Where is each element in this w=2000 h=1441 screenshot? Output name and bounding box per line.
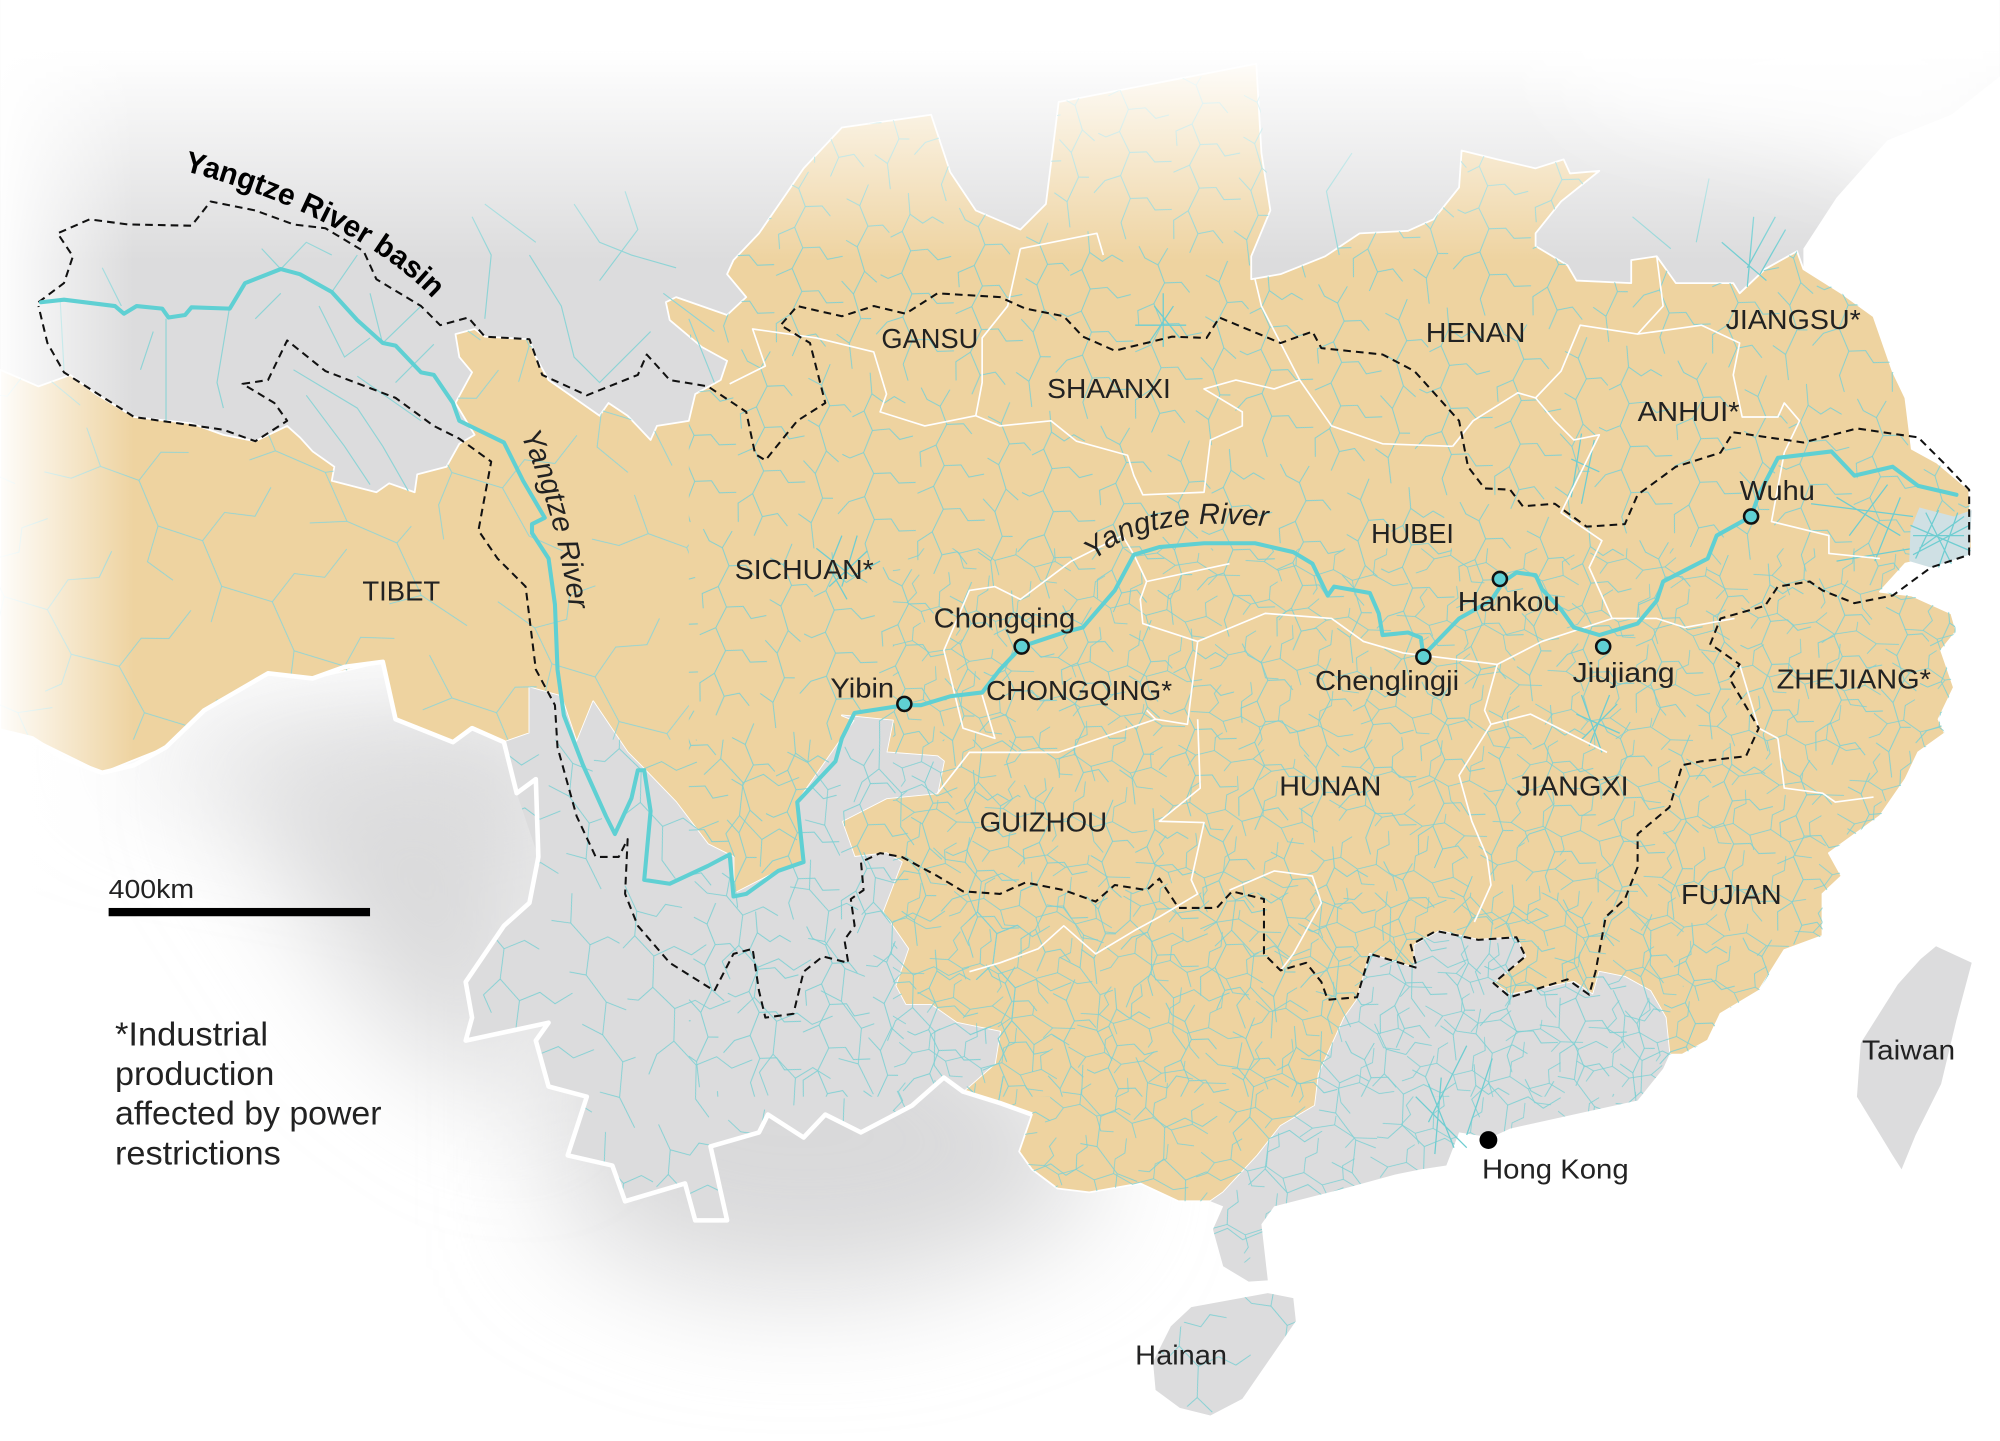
region and city labels: HUNAN xyxy=(1279,771,1381,802)
tan shaded region: provinces in the basin xyxy=(0,64,1972,1201)
region and city labels: SICHUAN* xyxy=(735,554,874,585)
grey land: Guangdong coast xyxy=(1210,931,1669,1282)
region and city labels: Hainan xyxy=(1135,1339,1227,1370)
city marker: Jiujiang xyxy=(1596,640,1610,654)
fade gradient: left edge xyxy=(0,0,134,893)
region and city labels: SHAANXI xyxy=(1047,373,1171,404)
region and city labels: JIANGXI xyxy=(1516,771,1629,802)
region and city labels: GANSU xyxy=(881,323,978,354)
region and city labels: Chenglingji xyxy=(1315,665,1459,696)
city marker: Wuhu xyxy=(1744,509,1758,523)
footnote xyxy=(115,1017,382,1172)
tributaries in the grey north and west xyxy=(60,153,1709,491)
Yangtze River main channel xyxy=(41,269,1956,896)
region and city labels: ANHUI* xyxy=(1638,396,1740,427)
footnote: restrictions xyxy=(115,1135,281,1172)
region and city labels xyxy=(362,304,1955,1370)
grey land north of the basin xyxy=(0,0,2000,536)
island: Taiwan xyxy=(1857,946,1972,1169)
city marker: Hankou xyxy=(1493,572,1507,586)
region and city labels: Hankou xyxy=(1458,586,1560,617)
footnote: *Industrial xyxy=(115,1017,268,1054)
thick white border: Tibet south and Yunnan xyxy=(0,662,1032,1220)
footnote: production xyxy=(115,1056,274,1093)
region and city labels: CHONGQING* xyxy=(986,675,1172,706)
fade gradient: top xyxy=(0,51,2000,261)
region and city labels: Jiujiang xyxy=(1573,657,1675,688)
island: Hainan xyxy=(1153,1293,1296,1415)
region and city labels: JIANGSU* xyxy=(1726,304,1861,335)
grey land: Yunnan and Tibet south edge xyxy=(466,687,1000,1220)
region and city labels: ZHEJIANG* xyxy=(1777,664,1931,695)
city marker: Hong Kong xyxy=(1479,1131,1497,1149)
basin label: Yangtze River basin xyxy=(189,151,441,298)
region and city labels: Yibin xyxy=(830,673,894,704)
river label: Yangtze River (north–south reach): Yangtze River xyxy=(523,429,585,608)
scale bar: 400km xyxy=(109,876,194,904)
river label: Yangtze River (middle reach): Yangtze River xyxy=(1083,502,1270,556)
region and city labels: GUIZHOU xyxy=(980,806,1107,837)
region and city labels: Chongqing xyxy=(934,602,1075,633)
fade: top right blur xyxy=(1505,0,2000,242)
provincial borders xyxy=(730,233,1880,972)
footnote: affected by power xyxy=(115,1096,382,1133)
Shanghai delta xyxy=(1909,508,1972,567)
region and city labels: FUJIAN xyxy=(1681,879,1782,910)
region and city labels: HUBEI xyxy=(1371,518,1454,549)
region and city labels: TIBET xyxy=(362,576,440,607)
fade to white: top edge xyxy=(0,0,2000,51)
city marker: Chongqing xyxy=(1015,640,1029,654)
region and city labels: Taiwan xyxy=(1862,1035,1955,1066)
region and city labels: HENAN xyxy=(1426,317,1525,348)
dense delta and lake tributaries xyxy=(816,217,1913,1154)
city marker: Yibin xyxy=(897,697,911,711)
region and city labels: Wuhu xyxy=(1740,475,1815,506)
scale bar xyxy=(109,876,370,916)
city marker: Chenglingji xyxy=(1416,650,1430,664)
dashed basin boundary xyxy=(38,201,1969,1018)
region and city labels: Hong Kong xyxy=(1482,1153,1629,1184)
